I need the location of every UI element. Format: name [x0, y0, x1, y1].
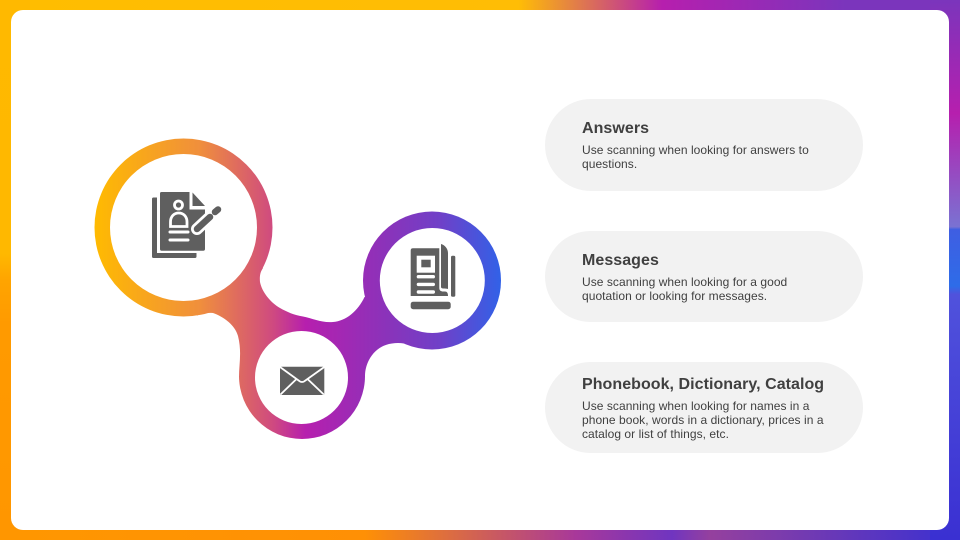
circle: document icon background [110, 154, 257, 301]
circle: book icon background [380, 228, 485, 333]
text: phonebook description: Use scanning when looking for names in a [582, 399, 809, 413]
circle: envelope icon background [255, 331, 348, 424]
panel: phonebook, dictionary, catalog [545, 362, 863, 453]
icon: book with newspaper page [411, 244, 455, 309]
icon: envelope [280, 367, 324, 395]
text: phonebook description [582, 399, 824, 441]
text: answers description [582, 143, 809, 171]
panel: messages [545, 231, 863, 322]
text: messages description: Use scanning when looking for a good [582, 275, 787, 289]
text: phonebook description: catalog or list of things, etc. [582, 427, 729, 441]
gradient connected blob [94, 138, 501, 439]
text: answers description: Use scanning when looking for answers to [582, 143, 809, 157]
text: messages description [582, 275, 787, 303]
text: phonebook description: phone book, words in a dictionary, prices in a [582, 413, 824, 427]
icon: resume document with pen [152, 192, 218, 258]
panel: answers [545, 99, 863, 191]
text: answers description: questions. [582, 157, 637, 171]
heading: messages: Messages [582, 252, 659, 269]
heading: answers: Answers [582, 120, 649, 137]
text: messages description: quotation or looking for messages. [582, 289, 767, 303]
heading: phonebook, dictionary, catalog: Phonebook, Dictionary, Catalog [582, 376, 824, 393]
